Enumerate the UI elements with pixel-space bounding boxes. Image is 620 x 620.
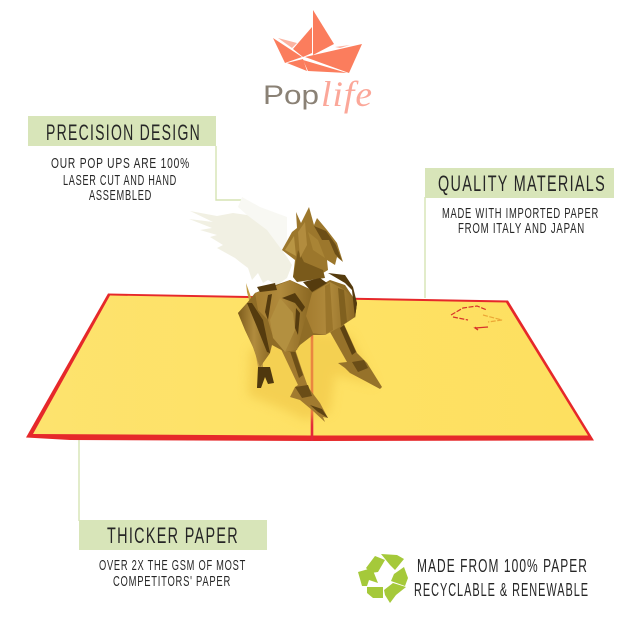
heading: precision design (28, 116, 216, 146)
heading: precision design: PRECISION DESIGN (46, 120, 201, 145)
text block: precision design: ASSEMBLED (89, 187, 152, 204)
text block: precision design: OUR POP UPS ARE 100% (51, 155, 190, 172)
text block: quality materials (442, 205, 599, 237)
body (238, 273, 357, 367)
card inner: yellow pages (33, 296, 588, 436)
flank lobe (270, 298, 295, 352)
icon: red gryphon emblem (451, 306, 502, 330)
text block: precision design (51, 155, 190, 204)
text block: thicker paper: COMPETITORS' PAPER (113, 573, 231, 590)
text block: thicker paper (99, 557, 246, 590)
hind paw (253, 340, 274, 388)
pop-up card (26, 294, 594, 441)
mid panel (255, 280, 312, 352)
back wing (238, 197, 287, 253)
panel: recycle note (358, 554, 589, 603)
logo wordmark: life (321, 74, 373, 114)
panel: thicker paper (79, 520, 267, 590)
icon: origami boat (273, 10, 362, 73)
shadow of figure (248, 330, 375, 420)
logo: Poplife (263, 10, 373, 114)
hind lobes (238, 303, 270, 367)
text: recycle note (414, 556, 589, 600)
dark slices (247, 273, 357, 353)
crease (311, 335, 313, 441)
near front leg (280, 340, 328, 422)
panel: quality materials (425, 168, 614, 237)
neck and head (282, 207, 343, 282)
text block: precision design: LASER CUT AND HAND (63, 172, 177, 189)
illustration: pegasus pop-up (189, 197, 382, 422)
far hind leg (330, 322, 382, 389)
card cover: red edge (26, 294, 594, 441)
chest lobe (306, 282, 357, 335)
text block: thicker paper: OVER 2X THE GSM OF MOST (99, 557, 246, 574)
leader lines (79, 146, 425, 521)
logo wordmark: Pop (263, 80, 319, 110)
white wings (189, 197, 292, 285)
heading: thicker paper (79, 520, 267, 550)
body silhouette (238, 280, 357, 367)
front wing feathers (189, 211, 292, 285)
tail tip (246, 283, 252, 304)
icon: recycle symbol (358, 554, 408, 603)
panel: precision design (28, 116, 216, 204)
logo wordmark (263, 74, 373, 114)
heading: thicker paper: THICKER PAPER (107, 523, 239, 548)
